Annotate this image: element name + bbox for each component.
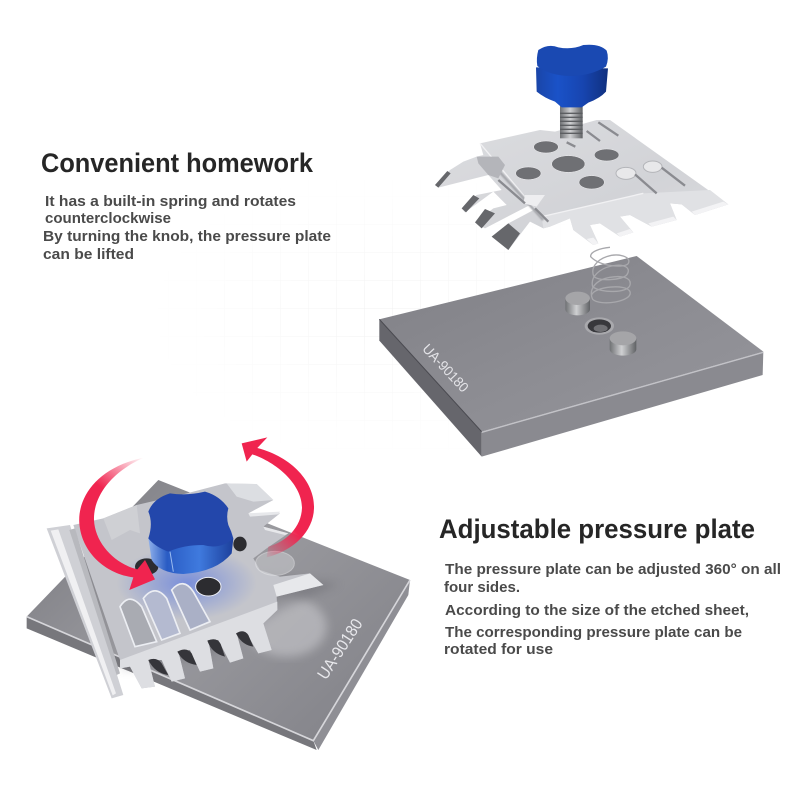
text block: pressure plate description: rotated for use — [444, 642, 553, 658]
translucent recess — [256, 551, 294, 575]
pressure plate holes — [516, 141, 662, 189]
right tabs — [227, 483, 323, 597]
spring — [591, 247, 630, 303]
text block: homework description: By turning the knob, the pressure plate — [43, 229, 331, 245]
pressure plate — [435, 120, 728, 250]
rotation arrow: left — [79, 458, 155, 590]
front teeth — [120, 602, 277, 688]
text block: pressure plate description: four sides. — [444, 580, 520, 596]
pressure plate slots — [498, 122, 685, 222]
side rail — [47, 525, 123, 698]
right tab highlights — [587, 202, 728, 245]
pressure plate — [47, 483, 340, 698]
blue knob — [148, 492, 233, 574]
base plate — [27, 480, 410, 750]
upper-left comb — [103, 505, 140, 540]
blue knob — [536, 45, 608, 107]
right pin — [610, 331, 636, 356]
text block: homework description: can be lifted — [43, 247, 134, 263]
base plate — [379, 247, 763, 457]
base plate engraving: UA-90180 — [313, 615, 367, 683]
text block: pressure plate description — [444, 562, 781, 658]
plate holes — [135, 537, 247, 596]
left pin — [565, 292, 590, 315]
threaded hole — [585, 317, 614, 335]
finger slots — [120, 584, 210, 647]
text block: homework description — [43, 194, 331, 263]
text block: pressure plate description: According to the size of the etched sheet, — [445, 603, 749, 619]
heading: convenient homework: Convenient homework — [41, 148, 314, 178]
exploded product view — [379, 45, 763, 457]
screw — [560, 105, 583, 138]
left recess — [477, 157, 505, 178]
notch openings — [148, 631, 253, 675]
plate reflection — [247, 597, 327, 657]
text block: homework description: It has a built-in spring and rotates — [45, 194, 296, 210]
text block: homework description: counterclockwise — [45, 211, 171, 227]
rotation arrows — [79, 437, 314, 590]
front face — [542, 190, 728, 245]
faint grid backdrop — [276, 246, 483, 384]
base plate engraving: UA-90180 — [419, 340, 472, 395]
rotation arrow: right — [242, 437, 314, 557]
text block: pressure plate description: The corresponding pressure plate can be — [445, 625, 742, 641]
knob glow — [117, 547, 257, 620]
text block: pressure plate description: The pressure plate can be adjusted 360° on all — [445, 562, 781, 578]
hook ends — [435, 171, 520, 250]
assembled product view — [27, 437, 410, 750]
heading: adjustable pressure plate: Adjustable pressure plate — [439, 514, 755, 544]
